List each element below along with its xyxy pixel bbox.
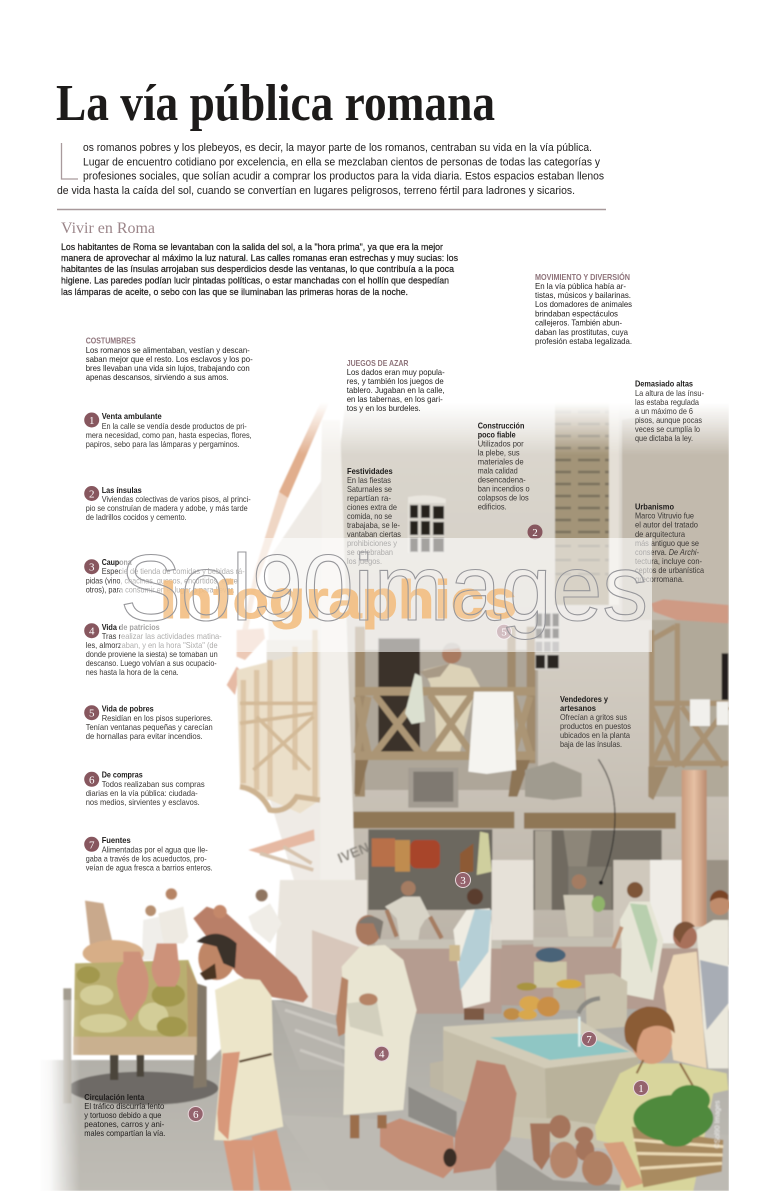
text: vendedores y artesanos: baja de las ínsulas. [560, 740, 622, 749]
text: construcción poco fiable: la plebe, sus [478, 448, 520, 458]
text: costumbres: Los romanos se alimentaban, vestían y descan- [86, 346, 250, 355]
right wall [613, 860, 728, 948]
marker 5 [496, 624, 512, 639]
shop graffiti: IVEN [335, 839, 371, 866]
item 3: caupona: otros), para consumir en el lugar o para llevar. [86, 586, 235, 595]
shopkeeper left [385, 881, 442, 940]
white sheet [468, 692, 516, 774]
pale side wall [318, 420, 358, 965]
man in toga [336, 915, 417, 1138]
hanging sausages [372, 832, 492, 875]
intro paragraph: de vida hasta la caída del sol, cuando se convertían en lugares peligrosos, terreno fértil para ladrones y sicarios. [57, 185, 575, 197]
shopkeeper right [563, 874, 605, 937]
intro paragraph: Lugar de encuentro cotidiano por excelencia, en ella se mezclaban cientos de personas de todas las categorías y [83, 156, 600, 168]
step left [408, 1087, 457, 1138]
background people [142, 888, 282, 960]
text: movimiento y diversión: daban las prostitutas, cuya [535, 328, 628, 337]
text: urbanismo: grecorromana. [635, 575, 684, 584]
callout line [598, 759, 615, 884]
text: festividades: repartían ra- [347, 494, 391, 503]
shop graffiti [335, 839, 539, 896]
item 4: vida de patricios: donde proviene la siesta) se tomaban un [86, 650, 218, 659]
item 1: venta ambulante: Venta ambulante [102, 412, 162, 421]
section heading: Vivir en Roma: Vivir en Roma [61, 220, 155, 237]
intro paragraph: profesiones sociales, que solían acudir a comprar los productos para la vida diaria. Estos espacios estaban llenos [83, 170, 604, 182]
balcony railing [355, 691, 535, 756]
text: juegos de azar: Los dados eran muy popula- [347, 368, 445, 377]
text: construcción poco fiable: Construcción [478, 422, 524, 430]
text: costumbres: apenas descansos, sirviendo a sus amos. [86, 373, 229, 382]
intro paragraph [57, 142, 604, 197]
text: construcción poco fiable: Utilizados por [478, 440, 524, 448]
woman in blue [449, 889, 492, 1020]
marker 1: 1 [638, 1083, 644, 1095]
item 6: de compras: 6 [89, 774, 95, 786]
item 7: fuentes: 7 [89, 839, 95, 851]
section paragraph: las lámparas de aceite, o sebo con las que se iluminaban las primeras horas de la noche. [61, 287, 408, 297]
text: demasiado altas: las estaba regulada [635, 398, 699, 407]
text: festividades: Saturnales se [347, 485, 392, 494]
watermark band [120, 538, 652, 652]
beams [353, 812, 676, 829]
boy with crate [595, 1007, 728, 1191]
right women [663, 890, 730, 1068]
item 1: venta ambulante: papiros, sebo para las lámparas y pergaminos. [86, 440, 240, 449]
amphora lying [380, 1118, 457, 1178]
upper fade to white [300, 380, 740, 455]
shop graffiti: 14·14 [508, 880, 536, 896]
text: movimiento y diversión: Los domadores de animales [535, 300, 632, 309]
item 6: de compras [84, 770, 205, 807]
item 4: vida de patricios: 4 [89, 626, 95, 638]
pillar between shops [492, 860, 533, 940]
item 5: vida de pobres: 5 [89, 708, 95, 720]
item 5: vida de pobres: de hornallas para evitar incendios. [86, 732, 203, 741]
item 1: venta ambulante: mera necesidad, como pan, hasta especias, flores, [86, 431, 252, 440]
left balcony [227, 628, 320, 813]
text: construcción poco fiable: mala calidad [478, 466, 518, 476]
item 2: las ínsulas: pio se construían de madera y adobe, y más tarde [86, 504, 248, 513]
pale left building [268, 480, 322, 960]
right margin mask [729, 380, 765, 1191]
item 6: de compras: Todos realizaban sus compras [102, 780, 205, 789]
building wall [318, 385, 729, 965]
item 6: de compras: nos medios, sirvientes y esclavos. [86, 798, 200, 807]
text: construcción poco fiable: edificios. [478, 502, 507, 512]
text: festividades: se celebraban [347, 548, 393, 557]
text: construcción poco fiable: colapsos de los [478, 494, 529, 502]
text: juegos de azar [347, 359, 445, 413]
item 3: caupona: pidas (vino, chacinas, quesos, encurtidos, entre [86, 576, 238, 586]
text: juegos de azar: en las tabernas, en los gari- [347, 395, 443, 404]
text: circulación lenta: y tortuoso debido a que [84, 1111, 162, 1120]
text: circulación lenta: peatones, carros y ani- [84, 1120, 165, 1129]
item 3: caupona: Caupona [102, 558, 132, 567]
section paragraph: higiene. Las paredes podían lucir pintadas políticas, o estar manchadas con el hollín que despedían [61, 276, 449, 286]
item 1: venta ambulante [84, 412, 252, 449]
marker 4: 4 [379, 1049, 385, 1061]
text: demasiado altas: a un máximo de 6 [635, 407, 693, 416]
text: urbanismo: Marco Vitruvio fue [635, 512, 694, 520]
amphorae on cart [117, 943, 180, 1022]
left awning [248, 829, 315, 870]
markers on the illustration [188, 524, 648, 1122]
fountain spout block [585, 973, 627, 1030]
relief [408, 768, 458, 808]
item 3: caupona: Especie de tienda de comidas y bebidas rá- [102, 567, 245, 576]
text: festividades: En las fiestas [347, 476, 391, 485]
item 4: vida de patricios: les, almorzaban, y en la hora "Sixta" (de [86, 641, 218, 650]
text: festividades: vantaban ciertas [347, 530, 401, 539]
text: festividades [347, 467, 401, 566]
item 2: las ínsulas: Viviendas colectivas de varios pisos, al princi- [102, 495, 251, 504]
marker 7 [582, 1032, 596, 1046]
item 4: vida de patricios: Vida de patricios [102, 623, 160, 632]
text: juegos de azar: tablero. Jugaban en la calle, [347, 386, 445, 395]
text: festividades: prohibiciones y [347, 539, 398, 548]
item 2: las ínsulas: de ladrillos cocidos y cemento. [86, 513, 187, 522]
woman in green [613, 882, 663, 1000]
text: construcción poco fiable: desencadena- [478, 476, 526, 484]
text: vendedores y artesanos [560, 695, 631, 749]
marker 4 [374, 1046, 389, 1061]
text: movimiento y diversión: callejeros. También abun- [535, 318, 622, 328]
text: festividades: Festividades [347, 467, 393, 476]
text: juegos de azar: res, y también los juegos de [347, 377, 444, 386]
man carrying amphora [193, 905, 308, 1191]
shop graffiti: GRANO [500, 861, 539, 881]
text: urbanismo: el autor del tratado [635, 520, 698, 530]
item 4: vida de patricios [84, 623, 222, 677]
text: circulación lenta: Circulación lenta [84, 1093, 145, 1102]
right shop [533, 830, 662, 910]
cart shadow [68, 1072, 218, 1105]
text: urbanismo: conserva. De Archi- [635, 548, 699, 557]
text: movimiento y diversión [535, 271, 632, 346]
text: movimiento y diversión: En la vía pública había ar- [535, 282, 626, 291]
text: costumbres: saban mejor que el resto. Los esclavos y los po- [86, 355, 253, 364]
text: urbanismo: tectura, incluye con- [635, 557, 702, 566]
foreground left figures [63, 888, 417, 1191]
pink wall base and pavement [40, 880, 729, 1191]
text: circulación lenta: males compartían la vía. [84, 1129, 165, 1138]
doorway [378, 638, 420, 753]
marker 3: 3 [460, 875, 466, 887]
fountain trough [443, 1017, 640, 1127]
text: vendedores y artesanos: Vendedores y [560, 695, 608, 704]
right shop counter [533, 937, 615, 947]
marker 1 [634, 1080, 648, 1096]
text: circulación lenta: El tráfico discurría lento [84, 1102, 165, 1111]
window right [535, 610, 559, 670]
text: demasiado altas [635, 380, 704, 443]
clay pots [530, 1115, 613, 1186]
item 5: vida de pobres: Vida de pobres [102, 704, 154, 714]
marker 7: 7 [586, 1034, 592, 1046]
item 7: fuentes: Fuentes [102, 836, 131, 845]
text: construcción poco fiable: ban incendios o [478, 484, 530, 494]
text: urbanismo: más antiguo que se [635, 539, 699, 548]
exposed stones [525, 762, 582, 800]
marker 6: 6 [193, 1109, 199, 1121]
lower left fade [38, 1000, 80, 1191]
item 4: vida de patricios: Tras realizar las actividades matina- [102, 632, 222, 641]
item 3: caupona [84, 558, 245, 595]
item 5: vida de pobres: Tenían ventanas pequeñas y carecían [86, 723, 213, 732]
text: movimiento y diversión: profesión estaba legalizada. [535, 337, 632, 346]
item 2: las ínsulas [84, 486, 251, 522]
marker 3 [456, 872, 470, 888]
cart with hay [73, 960, 197, 1055]
text: costumbres: bres llevaban una vida sin lujos, trabajando con [86, 364, 250, 373]
marker 5: 5 [501, 627, 507, 639]
credit: ©Sol90 Images [713, 1100, 721, 1148]
marker 2 [528, 524, 542, 540]
text: vendedores y artesanos: Ofrecían a gritos sus [560, 713, 627, 722]
text: construcción poco fiable: poco fiable [478, 430, 516, 440]
cart wheels and legs [63, 983, 207, 1103]
text: costumbres [86, 336, 253, 382]
text: costumbres: COSTUMBRES [86, 336, 136, 346]
brick column [555, 400, 619, 605]
lower step [495, 1143, 620, 1191]
marker 2: 2 [532, 527, 538, 539]
fountain base [430, 1060, 447, 1093]
watermark: Sol90images: Sol90images [120, 535, 648, 640]
title: La vía pública romana [56, 75, 495, 132]
text: festividades: comida, no se [347, 512, 392, 521]
basket and produce [503, 948, 585, 1020]
spout [578, 998, 600, 1013]
top window [408, 495, 446, 553]
drop cap L [62, 143, 78, 179]
marker 6 [188, 1106, 203, 1122]
item 3: caupona: 3 [89, 562, 95, 574]
text: festividades: los juegos. [347, 557, 382, 566]
man on balcony [420, 643, 480, 752]
item 4: vida de patricios: descanso. Luego volvían a sus ocupacio- [86, 659, 217, 668]
item 7: fuentes: veían de agua fresca a barrios enteros. [86, 864, 213, 872]
section paragraph [61, 242, 458, 297]
item 2: las ínsulas: Las ínsulas [102, 486, 142, 495]
item 4: vida de patricios: nes hasta la hora de la cena. [86, 668, 179, 677]
watermark: Infographics: Infographics [160, 570, 517, 630]
text: urbanismo [635, 502, 704, 584]
text: demasiado altas: que dictaba la ley. [635, 434, 693, 443]
text: festividades: trabajaba, se le- [347, 521, 400, 530]
text: vendedores y artesanos: ubicados en la planta [560, 731, 630, 740]
text: demasiado altas: La altura de las ínsu- [635, 389, 704, 398]
text: movimiento y diversión: MOVIMIENTO Y DIVERSIÓN [535, 271, 630, 282]
text: juegos de azar: JUEGOS DE AZAR [347, 359, 408, 368]
text: juegos de azar: tos y en los burdeles. [347, 404, 421, 413]
text: circulación lenta [84, 1093, 165, 1138]
text: movimiento y diversión: brindaban espectáculos [535, 310, 618, 318]
right balcony [648, 599, 728, 800]
item 6: de compras: diarias en la vía pública: ciudada- [86, 789, 198, 798]
text: urbanismo: Urbanismo [635, 502, 674, 512]
section paragraph: habitantes de las ínsulas arrojaban sus desperdicios desde las ventanas, lo que contribuía a la poca [61, 264, 454, 274]
balconies, shops and upper figures [227, 599, 728, 910]
left sloped roof edge [240, 393, 331, 640]
item 1: venta ambulante: 1 [89, 415, 94, 427]
text: vendedores y artesanos: artesanos [560, 704, 596, 713]
item 5: vida de pobres: Residían en los pisos superiores. [102, 714, 213, 723]
item 1: venta ambulante: En la calle se vendía desde productos de pri- [102, 422, 247, 431]
item 2: las ínsulas: 2 [89, 488, 94, 500]
fountain lower stone [508, 1117, 613, 1150]
left shop [368, 829, 492, 910]
left shop counter [375, 939, 502, 1014]
text: festividades: ciones extra de [347, 503, 397, 512]
text: construcción poco fiable: materiales de [478, 458, 524, 466]
item 7: fuentes: Alimentadas por el agua que lle- [102, 846, 208, 854]
text: demasiado altas: veces se cumplía lo [635, 425, 700, 434]
balcony posts [355, 627, 535, 797]
text: urbanismo: de arquitectura [635, 530, 685, 539]
text: urbanismo: ceptos de urbanística [635, 566, 704, 575]
item 6: de compras: De compras [102, 770, 143, 780]
item 7: fuentes: gaba a través de los acueductos, pro- [86, 854, 207, 864]
amphora standing [453, 1060, 517, 1173]
balcony corbels [354, 760, 530, 797]
section paragraph: manera de aprovechar al máximo la luz natural. Las calles romanas eran estrechas y muy sucias: los [61, 253, 458, 263]
shops and fountain scene [375, 860, 730, 1191]
intro paragraph: os romanos pobres y los plebeyos, es decir, la mayor parte de los romanos, centraban su vida en la vía pública. [83, 142, 592, 154]
text: construcción poco fiable [478, 422, 530, 512]
horse [83, 901, 144, 967]
text: demasiado altas: Demasiado altas [635, 380, 693, 388]
text: movimiento y diversión: tistas, músicos y bailarinas. [535, 291, 631, 300]
darker right wall [622, 400, 729, 620]
hanging left cloth [405, 673, 425, 724]
text: vendedores y artesanos: productos en puestos [560, 722, 631, 731]
text: demasiado altas: pisos, aunque pocas [635, 416, 702, 425]
item 5: vida de pobres [84, 704, 213, 741]
illustration: Roman street [38, 380, 740, 1191]
shaded wall behind balcony [358, 650, 538, 790]
item 7: fuentes [84, 836, 213, 872]
section paragraph: Los habitantes de Roma se levantaban con la salida del sol, a la "hora prima", ya que era la mejor [61, 242, 443, 252]
column [682, 770, 707, 910]
